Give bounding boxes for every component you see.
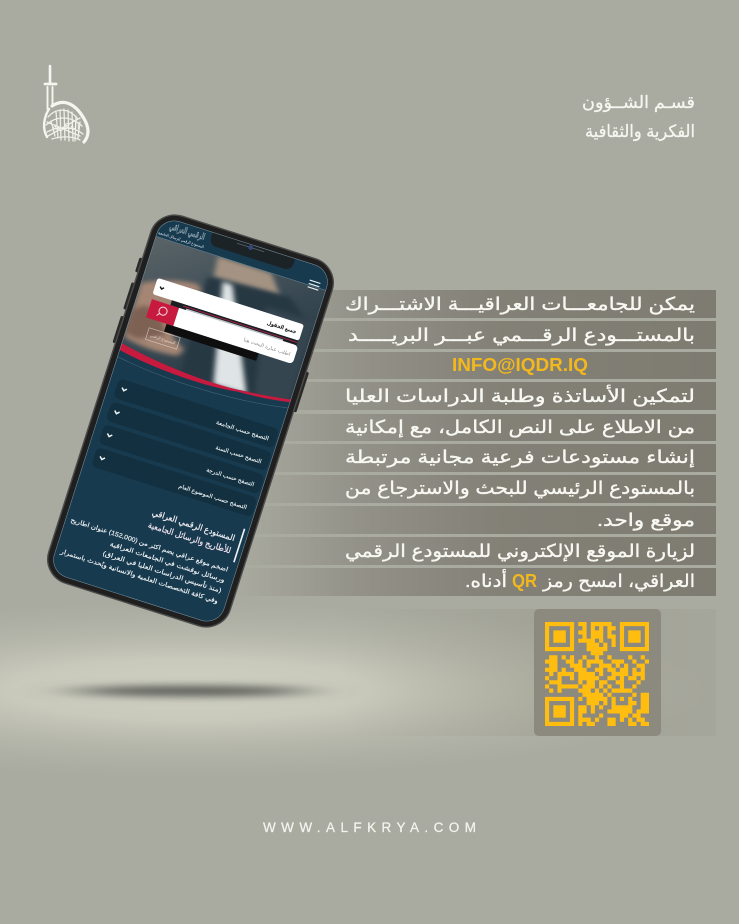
QR word: QR [512, 571, 537, 591]
message lines: العراقي، امسح رمز [542, 571, 695, 592]
message lines: من الاطلاع على النص الكامل، مع إمكانية [345, 417, 695, 438]
hero photo [118, 236, 326, 410]
logo: minaret and dome [44, 66, 88, 142]
phone side buttons [109, 257, 327, 413]
search field dropdown: جميع الحقول [266, 320, 297, 335]
stamp on hand [146, 328, 180, 349]
logo: minaret and dome: الفكرية [52, 121, 80, 131]
stamp on hand: المستودع الرقمي [149, 333, 176, 345]
camera [237, 243, 264, 252]
accordion rows [91, 378, 279, 517]
message lines: لزيارة الموقع الإلكتروني للمستودع الرقمي [345, 541, 695, 562]
site logotype [158, 224, 206, 248]
strip behind search [170, 300, 298, 346]
message lines: بالمستودع الرئيسي للبحث والاسترجاع من [345, 478, 695, 499]
black search button [164, 324, 259, 361]
notch [210, 232, 295, 269]
crimson curve [120, 344, 291, 402]
row backgrounds of the message panel [235, 290, 716, 596]
site logotype: الرقمي العراقي [168, 221, 206, 242]
phone body [41, 209, 340, 633]
accordion rows: التصفح حسب الموضوع العام [178, 484, 248, 511]
message lines: موقع واحد. [597, 510, 695, 531]
accordion rows: التصفح حسب الدرجة [205, 467, 255, 488]
accordion rows: التصفح حسب السنة [215, 445, 262, 465]
search field dropdown [152, 278, 304, 341]
search input: اطلب عبارة البحث هنا [243, 337, 291, 358]
QR code [545, 624, 649, 724]
QR code panel [534, 609, 661, 736]
search input [146, 299, 298, 364]
repository description: وفي كافة التخصصات العلمية والانسانية ويُحدث باستمرار [59, 548, 219, 605]
phone screen [49, 210, 334, 626]
message lines: لتمكين الأساتذة وطلبة الدراسات العليا [345, 385, 695, 407]
hand [124, 278, 204, 358]
message lines: إنشاء مستودعات فرعية مجانية مرتبطة [345, 447, 695, 468]
floor glow [0, 600, 739, 780]
phone mockup [38, 208, 343, 634]
heading: department name: قسـم الشــؤون [582, 93, 695, 113]
message lines: بالمستـــودع الرقـــمي عبـــر البريـــــد [348, 325, 695, 346]
site logotype: المستودع الرقمي للرسائل الجامعية [158, 230, 205, 249]
hamburger menu [308, 280, 320, 290]
repository description [59, 517, 229, 605]
repository description: اضخم موقع عراقي يضم اكثر من (152,000) عنوان اطاريح [70, 517, 229, 574]
heading: department name: الفكرية والثقافية [585, 122, 695, 141]
heading: department name [582, 93, 695, 141]
repository title: للأطاريح والرسائل الجامعية [147, 519, 233, 555]
screen header [156, 216, 332, 290]
email address: INFO@IQDR.IQ [452, 355, 588, 375]
footer website URL: WWW.ALFKRYA.COM [263, 820, 476, 835]
message lines: يمكن للجامعـــات العراقيـــة الاشتـــراك [345, 294, 695, 315]
repository description: ورسائل نوقشت في الجامعات العراقية [109, 541, 226, 584]
phone ground shadow [72, 686, 308, 696]
message lines: أدناه. [465, 569, 507, 591]
QR band backdrop [340, 609, 716, 736]
repository description: (منذ تأسيس الدراسات العليا في العراق) [102, 548, 223, 595]
accordion rows: التصفح حسب الجامعة [215, 420, 270, 443]
message lines [345, 294, 695, 592]
text panel: subscription message [345, 294, 695, 592]
repository title: المستودع الرقمي العراقي [151, 507, 236, 543]
